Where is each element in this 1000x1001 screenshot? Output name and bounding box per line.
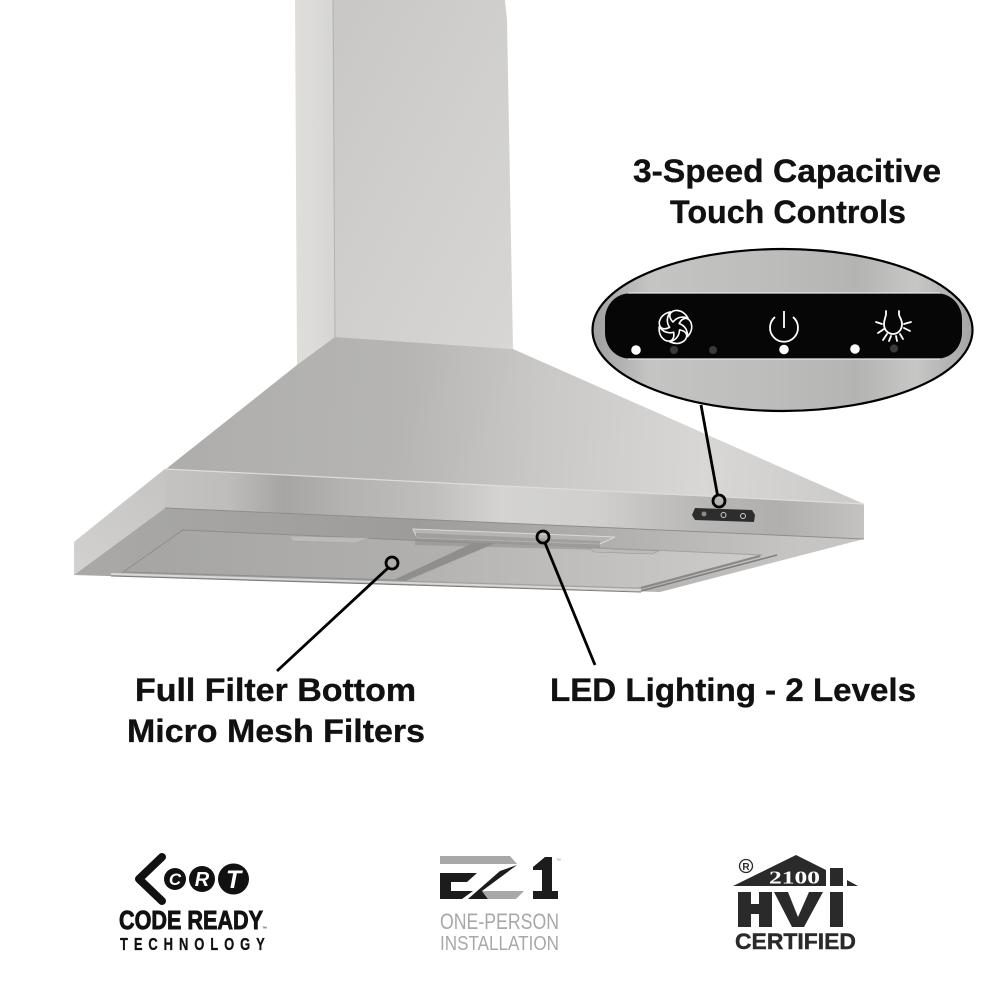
- heading: filters: [127, 672, 425, 749]
- E Z mark: [440, 856, 524, 899]
- underside: [74, 508, 864, 592]
- logo: EZ1 one-person installation: ONE-PERSON: [440, 909, 559, 934]
- CRT badges: C: [169, 870, 182, 889]
- right mesh filter: [405, 543, 762, 588]
- icon: chevron: [139, 857, 162, 901]
- heading: touch controls: 3-Speed Capacitive: [633, 153, 941, 189]
- logo: code ready technology: TECHNOLOGY: [120, 935, 265, 955]
- oval brushed steel background: [592, 249, 972, 411]
- roof: [733, 855, 826, 886]
- left mesh filter: [123, 530, 474, 580]
- CRT badges: R: [195, 869, 210, 891]
- chimney side face: [295, 0, 335, 366]
- heading: LED lighting: LED Lighting - 2 Levels: [550, 672, 916, 708]
- hood control panel: [692, 508, 755, 522]
- icon: power: [770, 311, 798, 342]
- front band: [165, 469, 864, 539]
- logo: HVI 2100 certified: 2100: [769, 868, 820, 888]
- touch controls magnified oval: [592, 249, 972, 411]
- heading: touch controls: [633, 153, 941, 230]
- left filter tab: [289, 536, 369, 543]
- canopy slope: [74, 337, 864, 542]
- heading: filters: Micro Mesh Filters: [127, 713, 425, 749]
- right filter tab: [589, 548, 659, 554]
- black control strip: [605, 294, 962, 358]
- HVI letters: [738, 892, 843, 927]
- callout line: touch controls: [701, 405, 725, 507]
- filter divider: [395, 543, 495, 581]
- icon: light bulb: [876, 311, 911, 341]
- bottom rails: [111, 574, 641, 590]
- chimney front face: [333, 0, 513, 349]
- callout line: filters: [277, 557, 398, 671]
- logo: EZ1 one-person installation: [440, 856, 561, 955]
- logo: code ready technology: [119, 857, 267, 955]
- logo: EZ1 one-person installation: INSTALLATION: [440, 932, 559, 955]
- logo: code ready technology: CODE READY: [119, 905, 263, 935]
- heading: touch controls: Touch Controls: [670, 194, 906, 230]
- CRT badges: [164, 864, 249, 894]
- CRT badges: T: [226, 866, 244, 894]
- registered mark: R: [742, 862, 750, 873]
- logo: code ready technology: ™: [262, 926, 267, 932]
- logo: HVI 2100 certified: CERTIFIED: [735, 929, 856, 954]
- logo: HVI 2100 certified: [733, 855, 858, 954]
- callout line: LED lighting: [537, 531, 595, 665]
- LED light bar: [413, 529, 615, 544]
- canopy left side face: [74, 469, 165, 575]
- logo: EZ1 one-person installation: ™: [556, 858, 561, 864]
- range hood product illustration: [74, 0, 864, 592]
- heading: filters: Full Filter Bottom: [135, 672, 416, 708]
- icon: fan: [655, 310, 695, 348]
- indicator lights: [631, 344, 898, 355]
- numeral one: [533, 857, 558, 899]
